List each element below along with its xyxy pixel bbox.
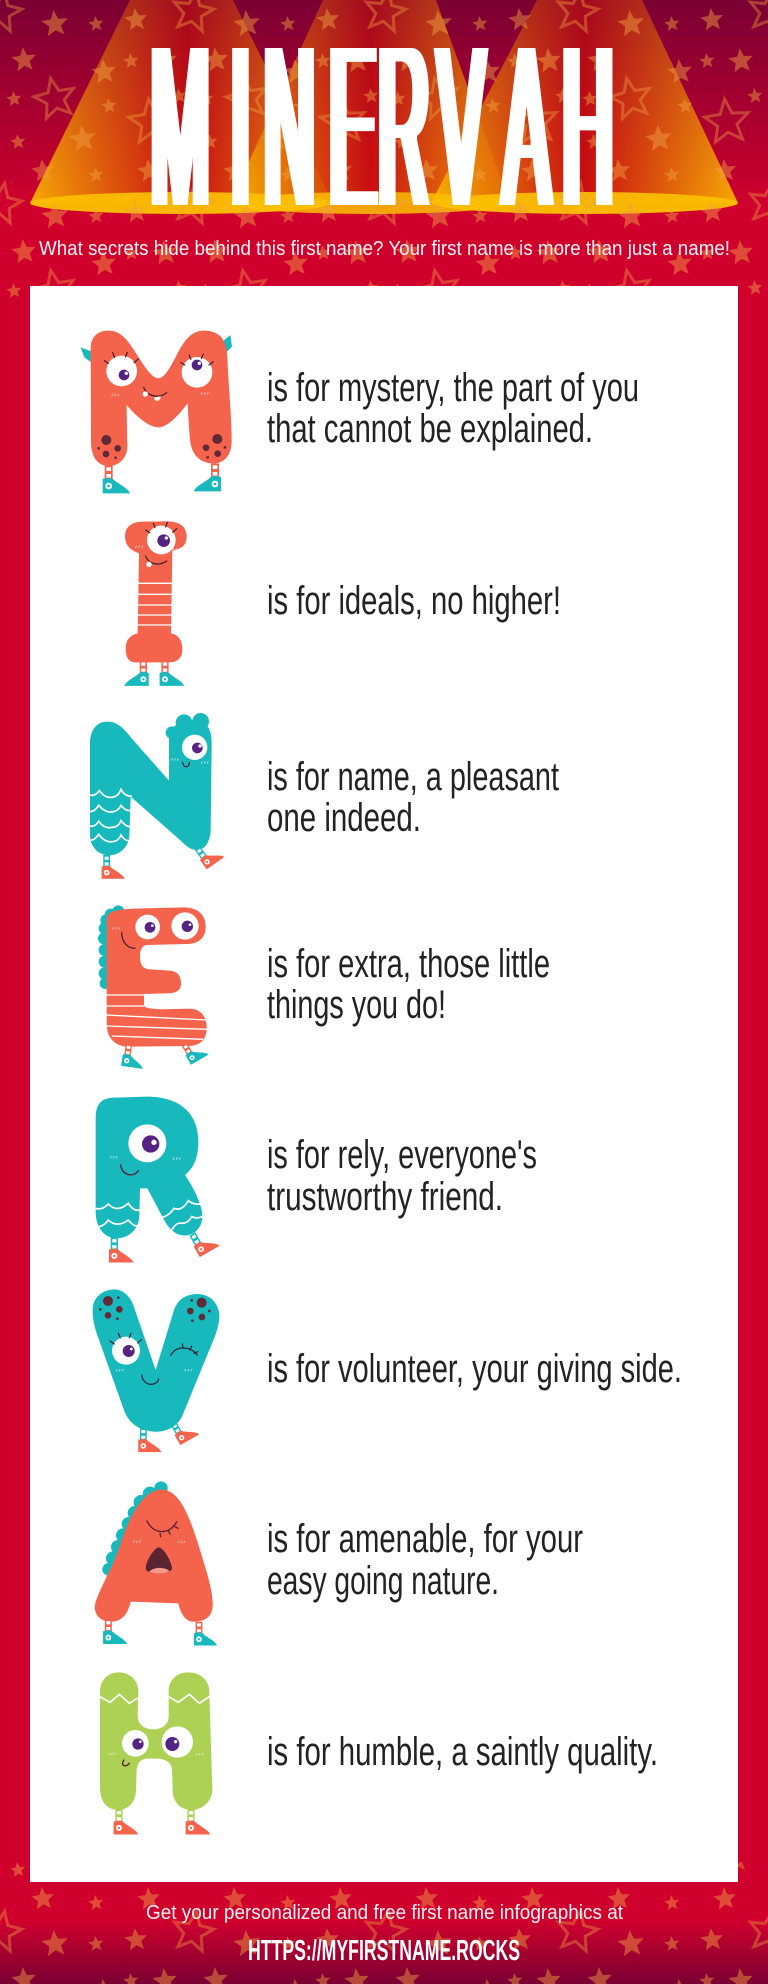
footer url: HTTPS://MYFIRSTNAME.ROCKS (248, 1935, 520, 1967)
text: M (267, 366, 639, 451)
text: E: things you do! (267, 983, 446, 1027)
subtitle: What secrets hide behind this first name? Your first name is more than just a name! (39, 238, 730, 260)
spotlights (30, 0, 738, 214)
letter H monster (100, 1672, 212, 1835)
text: A: is for amenable, for your (267, 1517, 583, 1561)
text: A: easy going nature. (267, 1559, 499, 1603)
text: I: is for ideals, no higher! (267, 579, 561, 623)
text: M: that cannot be explained. (267, 407, 593, 451)
text: A (267, 1517, 583, 1603)
text: R: trustworthy friend. (267, 1175, 503, 1219)
letter R monster (96, 1097, 220, 1263)
letter V monster (93, 1289, 219, 1452)
footer line: Get your personalized and free first name infographics at (146, 1902, 623, 1924)
letter I monster (124, 521, 187, 686)
text: R (267, 1133, 537, 1219)
letter A monster (95, 1481, 217, 1645)
star pattern top (0, 0, 768, 300)
text: N (267, 755, 559, 840)
star pattern bottom (0, 1862, 768, 1984)
text: N: is for name, a pleasant (267, 755, 559, 799)
letter E monster (98, 905, 209, 1069)
panel: white card (30, 286, 738, 1882)
text: M: is for mystery, the part of you (267, 366, 639, 410)
text: N: one indeed. (267, 796, 421, 840)
text: R: is for rely, everyone's (267, 1133, 537, 1177)
title: MINERVAH (151, 0, 613, 257)
letter M monster (81, 331, 232, 493)
letter N monster (90, 713, 224, 879)
text: E (267, 942, 550, 1027)
text: E: is for extra, those little (267, 942, 550, 986)
